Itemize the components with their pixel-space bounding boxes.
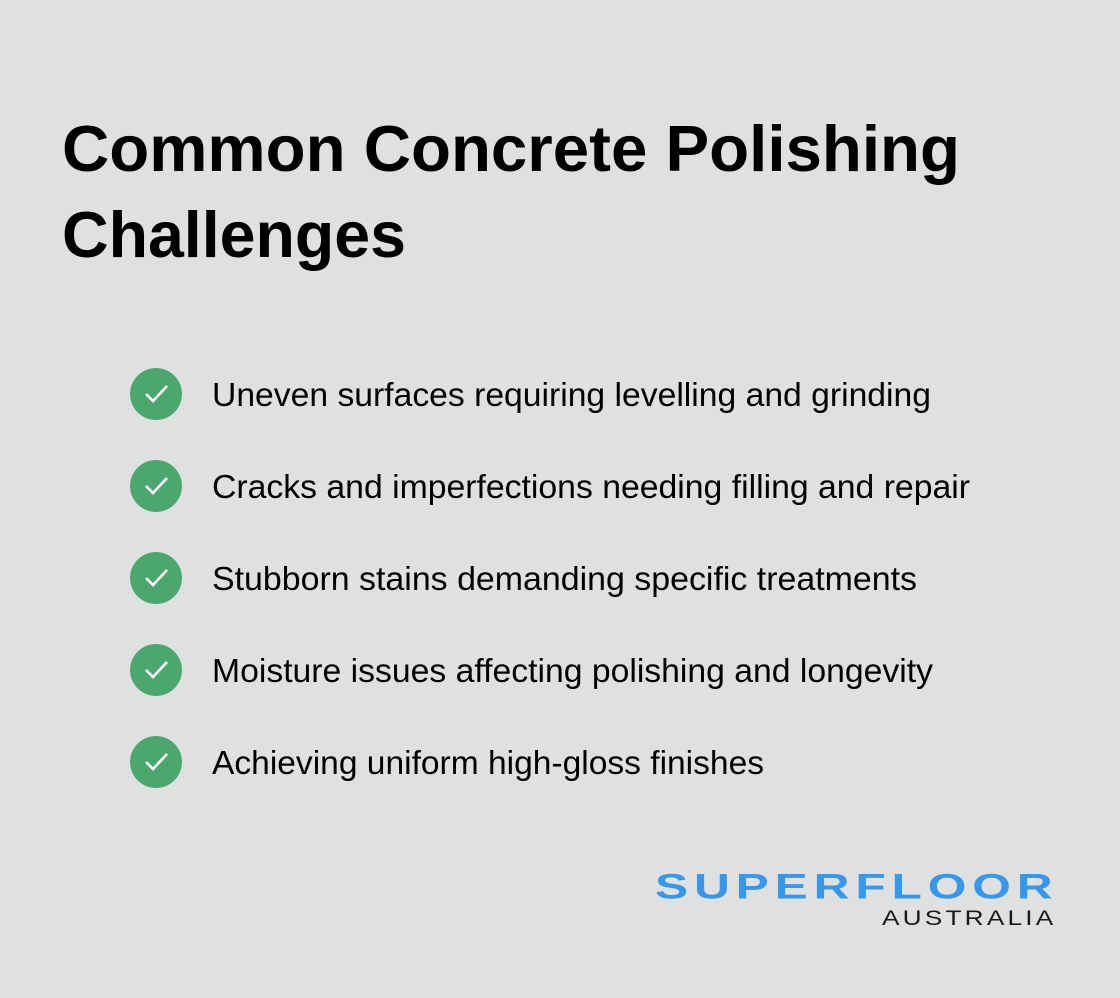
title: Challenges [62,198,406,271]
item 1 [130,368,931,420]
item 3: Stubborn stains demanding specific treatments [212,560,917,597]
item 1: Uneven surfaces requiring levelling and grinding [212,376,931,413]
title [62,112,960,271]
title: Common Concrete Polishing [62,112,960,185]
item 3 [130,552,917,604]
item 4 [130,644,934,696]
logo: Superfloor Australia: AUSTRALIA [882,906,1053,930]
item 5: Achieving uniform high-gloss finishes [212,744,764,781]
logo: Superfloor Australia [655,868,1053,930]
item 4: Moisture issues affecting polishing and longevity [212,652,934,689]
logo: Superfloor Australia: SUPERFLOOR [655,868,1053,907]
item 2: Cracks and imperfections needing filling and repair [212,468,970,505]
item 5 [130,736,764,788]
item 2 [130,460,970,512]
checklist [130,368,970,788]
